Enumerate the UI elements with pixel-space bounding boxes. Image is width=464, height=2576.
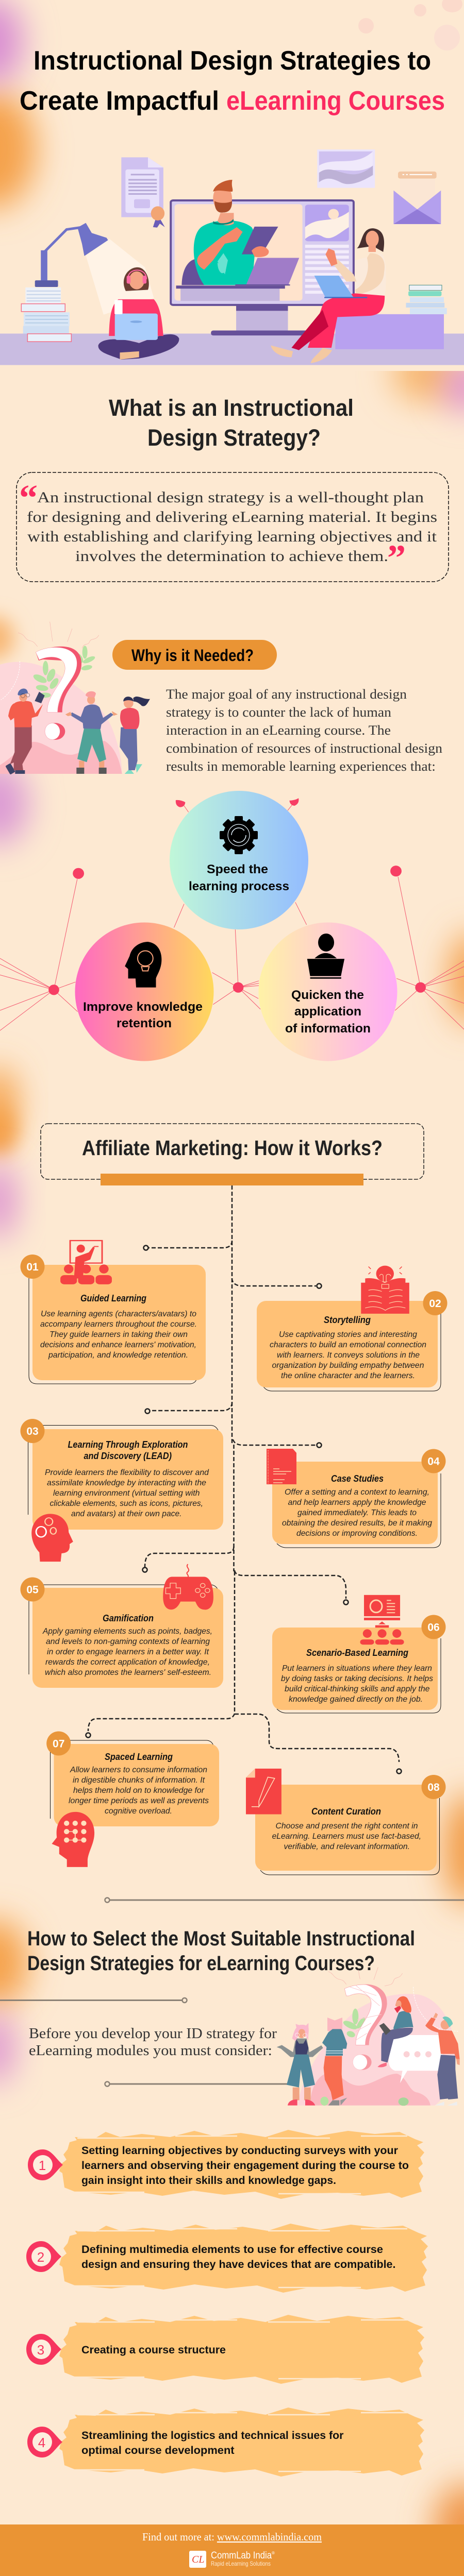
person reading book — [322, 2018, 347, 2106]
card 03: LEAD: and Discovery (LEAD) — [84, 1450, 172, 1461]
card 06: scenario-based learning: by doing tasks or taking decisions. It helps — [281, 1674, 433, 1683]
logo — [189, 2550, 275, 2568]
leaves — [320, 2009, 409, 2106]
benefit: speed the learning process: Speed the — [207, 862, 268, 876]
card 03: LEAD: 03 — [26, 1426, 39, 1437]
woman with laptop on floor — [98, 267, 179, 360]
icon: open book with bulb — [361, 1266, 409, 1314]
section heading: what is an ID strategy: What is an Instructional — [109, 395, 354, 421]
badge — [422, 1449, 445, 1473]
card 02: storytelling: Storytelling — [324, 1314, 371, 1325]
person with book — [5, 688, 45, 775]
card 06: scenario-based learning: build critical-thinking skills and apply the — [285, 1685, 430, 1693]
step 2: design and ensuring they have devices that are compatible. — [81, 2259, 396, 2270]
card 05: gamification: 05 — [26, 1584, 39, 1596]
benefit: improve knowledge retention: Improve knowledge — [83, 1000, 203, 1014]
question mark — [36, 647, 81, 740]
card 08: content curation: 08 — [427, 1782, 440, 1793]
intro sentence — [29, 2026, 289, 2087]
card 05: gamification — [21, 1564, 223, 1688]
card 08: content curation: Content Curation — [311, 1806, 381, 1817]
benefit: improve knowledge retention — [75, 922, 213, 1061]
logo: Rapid eLearning Solutions — [211, 2560, 271, 2567]
number marker: 4 — [38, 2435, 45, 2450]
card 03: LEAD: Learning Through Exploration — [68, 1439, 188, 1450]
card 08: content curation — [246, 1769, 445, 1875]
card 06: scenario-based learning: 06 — [427, 1622, 440, 1633]
man waving — [425, 2013, 460, 2106]
badge — [423, 1291, 448, 1315]
pill heading: why is it needed: Why is it Needed? — [131, 646, 254, 665]
card 08: content curation: verifiable, and relevant information. — [284, 1842, 410, 1851]
card 07: spaced learning — [46, 1731, 219, 1867]
card 04: case studies: 04 — [427, 1456, 440, 1467]
number marker — [28, 2149, 63, 2180]
card 07: spaced learning: helps them hold on to knowledge for — [73, 1786, 205, 1795]
intro sentence: eLearning modules you must consider: — [29, 2043, 272, 2059]
card 01: guided learning: Guided Learning — [80, 1293, 146, 1303]
card 07: spaced learning: cognitive overload. — [105, 1807, 172, 1816]
badge — [21, 1578, 44, 1601]
section heading: how to select: How to Select the Most Suitable Instructional — [27, 1927, 415, 1950]
floor — [0, 333, 464, 365]
benefit: quicken application: of information — [285, 1022, 371, 1036]
card 01: guided learning: Use learning agents (characters/avatars) to — [41, 1310, 196, 1318]
man with tablet — [181, 180, 299, 285]
benefit: quicken application: application — [294, 1005, 361, 1019]
badge — [21, 1255, 44, 1279]
card 03: LEAD: clickable elements, such as icons, pictures, — [49, 1499, 203, 1508]
why needed paragraph: strategy is to counter the lack of human — [166, 705, 391, 720]
closing quote mark: ” — [387, 537, 406, 579]
number marker: 3 — [37, 2342, 44, 2358]
section heading: affiliate marketing: Affiliate Marketing: How it Works? — [82, 1136, 383, 1160]
section heading: how to select: Design Strategies for eLearning Courses? — [27, 1952, 375, 1975]
card 05: gamification: Apply gaming elements such as points, badges, — [42, 1627, 212, 1636]
envelope — [393, 172, 441, 224]
why needed paragraph: combination of resources of instructional design — [166, 741, 442, 756]
card 03: LEAD: assimilate knowledge by interacting with the — [47, 1479, 206, 1487]
icon: game controller — [163, 1564, 213, 1609]
badge — [422, 1775, 445, 1799]
definition quote box: An instructional design strategy is a well-thought plan — [37, 489, 424, 506]
benefit: speed the learning process — [170, 791, 308, 929]
person shrugging — [65, 691, 118, 774]
card 03: LEAD: learning environment (virtual setting with — [53, 1489, 200, 1498]
step 1 — [28, 2130, 424, 2199]
network lines and dots behind circles — [0, 798, 464, 1030]
step 2 — [26, 2224, 428, 2293]
icon: teacher and learners — [60, 1241, 112, 1284]
badge — [422, 1615, 445, 1639]
number marker — [26, 2241, 61, 2272]
card 06: scenario-based learning: knowledge gained directly on the job. — [289, 1695, 423, 1704]
card 03: LEAD: and avatars) at their own pace. — [71, 1510, 181, 1518]
icon: head with nodes — [52, 1812, 94, 1867]
card 06: scenario-based learning: Scenario-Based Learning — [306, 1647, 408, 1658]
card 02: storytelling: organization by building empathy between — [272, 1361, 424, 1370]
icon: head with gears — [31, 1514, 73, 1562]
desk lamp and light beam — [35, 223, 154, 315]
book stack left — [21, 287, 71, 342]
card 04: case studies: obtaining the desired results, be it making — [282, 1519, 432, 1528]
opening quote mark: “ — [19, 477, 38, 518]
number marker — [26, 2334, 61, 2365]
card 05: gamification: rewards the correct application of knowledge, — [45, 1658, 210, 1667]
timeline spine and connectors — [88, 1185, 399, 1762]
card 01: guided learning: accompany learners throughout the course. — [40, 1320, 197, 1329]
card 06: scenario-based learning — [272, 1595, 445, 1713]
leaves — [32, 646, 96, 698]
title — [20, 46, 445, 116]
step 3: Creating a course structure — [81, 2344, 226, 2356]
intro sentence: Before you develop your ID strategy for — [29, 2026, 277, 2042]
card 05: gamification: in order to engage learners in a better way. It — [47, 1648, 209, 1656]
step 4: Streamlining the logistics and technical issues for — [81, 2430, 343, 2442]
certificate — [121, 157, 165, 228]
badge — [46, 1731, 71, 1756]
card 04: case studies: decisions or improving conditions. — [296, 1529, 418, 1538]
step 1: gain insight into their skills and knowledge gaps. — [81, 2175, 336, 2187]
hero illustration — [0, 149, 464, 365]
pill heading: why is it needed — [112, 640, 277, 670]
card 07: spaced learning: 07 — [53, 1738, 64, 1750]
card 04: case studies: and help learners apply the knowledge — [288, 1498, 426, 1507]
step 4: optimal course development — [81, 2445, 235, 2456]
step 2: Defining multimedia elements to use for effective course — [81, 2244, 383, 2256]
title: Instructional Design Strategies to — [34, 46, 431, 76]
card 05: gamification: Gamification — [103, 1613, 154, 1623]
number marker: 2 — [37, 2249, 44, 2265]
icon: screen and audience — [360, 1595, 404, 1645]
card 04: case studies: gained immediately. This leads to — [297, 1509, 417, 1517]
card 01: guided learning: participation, and knowledge retention. — [48, 1351, 188, 1360]
card 03: LEAD — [21, 1419, 223, 1562]
woman in blue dress — [277, 2023, 323, 2106]
card 07: spaced learning: Allow learners to consume information — [70, 1766, 207, 1774]
icon: person at laptop — [307, 934, 344, 979]
icon: gear — [220, 816, 258, 854]
card 01: guided learning: They guide learners in taking their own — [49, 1330, 188, 1339]
logo: ® — [272, 2551, 275, 2555]
card 07: spaced learning: in digestible chunks of information. It — [73, 1776, 205, 1785]
section heading: what is an ID strategy: Design Strategy? — [147, 425, 321, 451]
benefit: improve knowledge retention: retention — [117, 1016, 172, 1030]
definition quote box — [16, 472, 449, 582]
definition quote box: involves the determination to achieve them. — [75, 548, 388, 565]
why needed paragraph: interaction in an eLearning course. The — [166, 723, 391, 738]
step 3 — [26, 2315, 424, 2384]
woman sitting with laptop — [377, 1996, 413, 2067]
number marker: 1 — [39, 2158, 46, 2173]
card 05: gamification: which also promotes the learners' self-esteem. — [45, 1668, 211, 1677]
illustration: people around question mark — [0, 622, 150, 775]
benefit: quicken application — [259, 922, 397, 1061]
illustration: people with speech bubble — [277, 1967, 460, 2106]
definition quote box: for designing and delivering eLearning material. It begins — [27, 509, 437, 526]
benefit: quicken application: Quicken the — [291, 988, 364, 1002]
step 1: learners and observing their engagement during the course to — [81, 2160, 409, 2172]
section heading: affiliate marketing — [41, 1124, 424, 1185]
logo: CommLab India — [211, 2550, 272, 2561]
card 01: guided learning: 01 — [26, 1261, 39, 1273]
icon: page with pen — [246, 1769, 281, 1815]
woman on box with laptop — [271, 228, 444, 363]
section heading: what is an ID strategy — [109, 395, 354, 451]
definition quote box: with establishing and clarifying learning objectives and it — [27, 528, 437, 545]
card 02: storytelling: with learners. It conveys solutions in the — [277, 1351, 420, 1360]
card 02: storytelling: the online character and the learners. — [281, 1371, 415, 1380]
card 02: storytelling: characters to build an emotional connection — [270, 1341, 426, 1349]
card 05: gamification: and levels to non-gaming contexts of learning — [46, 1637, 210, 1646]
card 03: LEAD: Provide learners the flexibility to discover and — [45, 1468, 209, 1477]
question mark — [344, 1985, 387, 2070]
footer — [0, 2524, 464, 2576]
card 02: storytelling: Use captivating stories and interesting — [279, 1330, 417, 1339]
step 4 — [27, 2408, 424, 2477]
card 04: case studies — [267, 1449, 445, 1548]
person with ponytail — [120, 697, 150, 774]
number marker — [27, 2427, 62, 2458]
card 07: spaced learning: Spaced Learning — [105, 1751, 173, 1762]
why needed paragraph: results in memorable learning experiences that: — [166, 759, 436, 774]
connector end rings — [86, 1246, 401, 1773]
card 04: case studies: Case Studies — [331, 1473, 384, 1484]
card 01: guided learning — [21, 1241, 206, 1384]
why needed paragraph: The major goal of any instructional design — [166, 687, 407, 702]
title: Create Impactful — [20, 86, 219, 116]
card 02: storytelling — [257, 1266, 448, 1391]
section heading: how to select — [0, 1898, 464, 2003]
card 08: content curation: eLearning. Learners must use fact-based, — [272, 1832, 421, 1841]
card 01: guided learning: decisions and enhance learners' motivation, — [40, 1341, 196, 1349]
step 1: Setting learning objectives by conducting surveys with your — [81, 2145, 398, 2157]
card 08: content curation: Choose and present the right content in — [275, 1822, 418, 1831]
card 04: case studies: Offer a setting and a context to learning, — [285, 1488, 429, 1497]
logo: CL — [192, 2554, 204, 2565]
icon: head with bulb — [125, 942, 161, 988]
card 07: spaced learning: longer time periods as well as prevents — [69, 1797, 209, 1805]
why needed paragraph — [166, 687, 442, 774]
icon: document — [267, 1449, 296, 1484]
title: eLearning Courses — [226, 86, 445, 116]
book stack right — [406, 285, 447, 314]
badge — [21, 1419, 44, 1443]
benefit: speed the learning process: learning process — [189, 879, 289, 893]
monitor — [171, 200, 354, 335]
card 06: scenario-based learning: Put learners in situations where they learn — [282, 1664, 432, 1673]
framed picture — [317, 149, 375, 188]
speech bubble — [389, 2035, 442, 2083]
footer: Find out more at: www.commlabindia.com — [142, 2531, 322, 2543]
card 02: storytelling: 02 — [429, 1298, 441, 1310]
